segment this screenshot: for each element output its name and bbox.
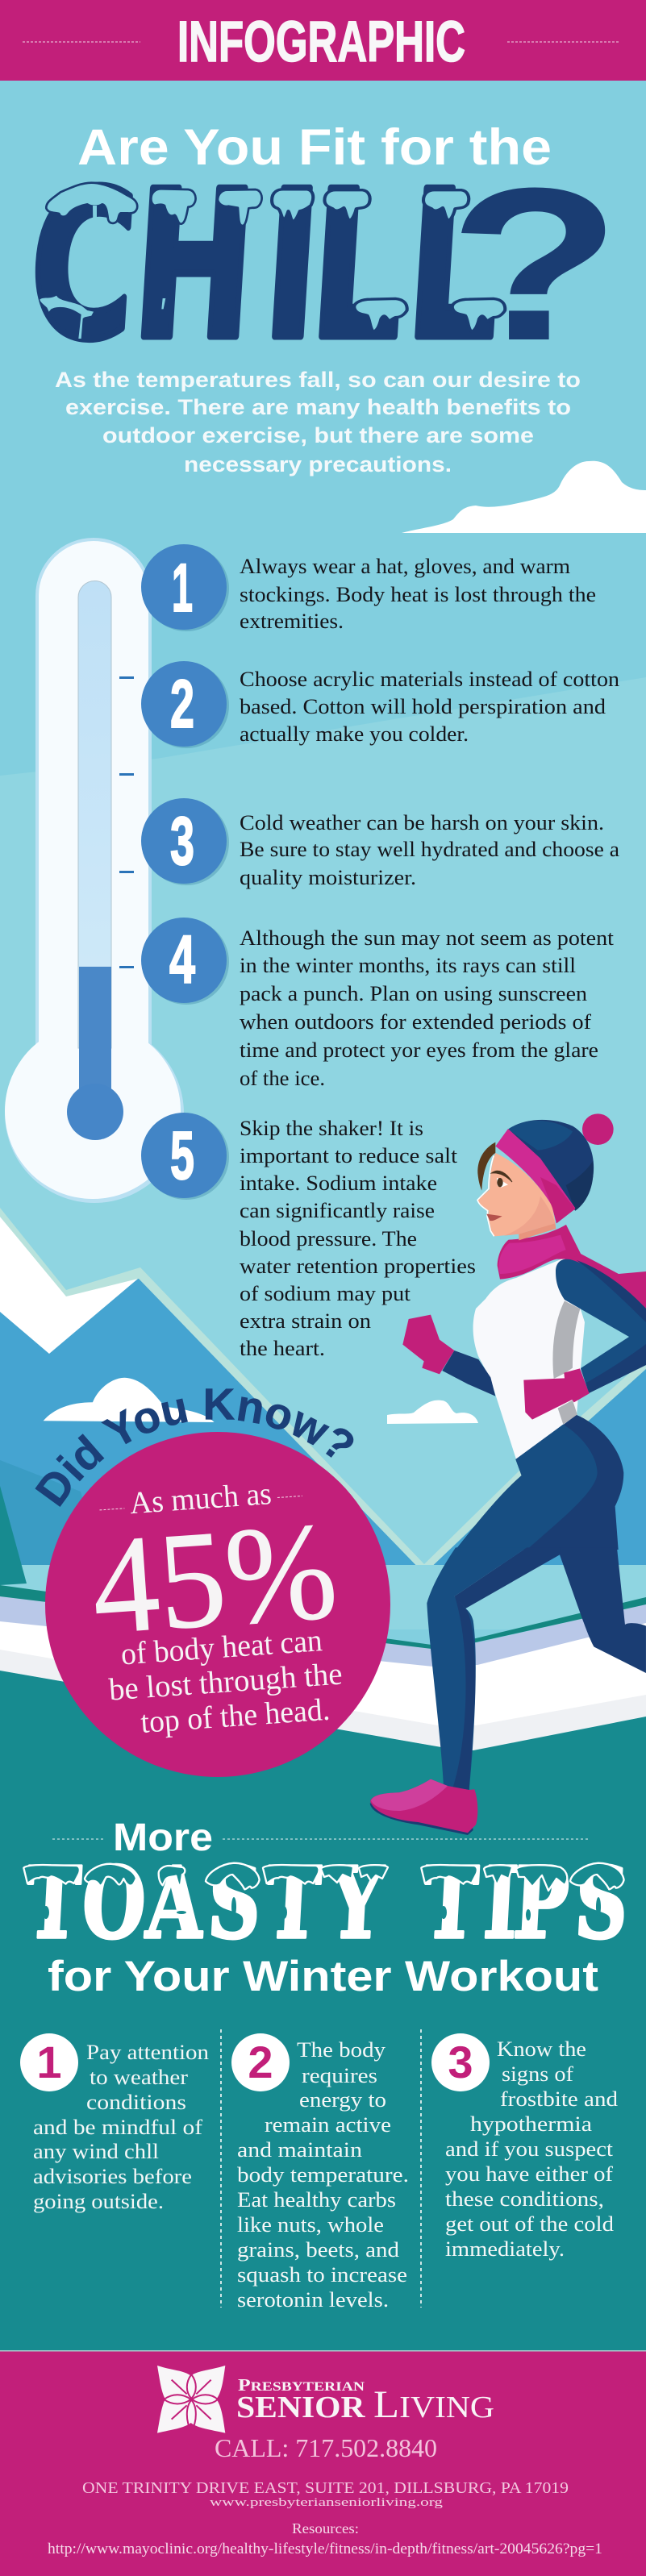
did you know callout: As much as: [129, 1476, 273, 1521]
toasty tip 3: these conditions,: [445, 2187, 604, 2211]
toasty tip 2: requires: [302, 2064, 377, 2087]
logo wordmark: SENIOR LIVING: [236, 2383, 494, 2426]
toasty tip 2: and maintain: [237, 2138, 362, 2162]
mercury: [79, 967, 111, 1104]
footer: [0, 2350, 646, 2576]
toasty tip 2: squash to increase: [237, 2263, 407, 2287]
toasty tip 1: conditions: [86, 2091, 186, 2114]
title line: Are You Fit for the: [77, 119, 552, 176]
toasty tip 2: Eat healthy carbs: [237, 2188, 396, 2212]
did you know callout: [35, 1388, 390, 1777]
toasty tip 3: [431, 2033, 618, 2261]
tip 4: pack a punch. Plan on using sunscreen: [240, 982, 587, 1005]
tip 1: Always wear a hat, gloves, and warm: [240, 555, 570, 578]
column dividers: [221, 2029, 421, 2308]
toasty tip 2: grains, beets, and: [237, 2238, 399, 2262]
tip 3: 3: [170, 803, 194, 879]
intro paragraph: As the temperatures fall, so can our desire to: [55, 368, 581, 392]
phone: CALL: 717.502.8840: [215, 2433, 437, 2462]
toasty tip 1: to weather: [90, 2066, 188, 2089]
tip 4: Although the sun may not seem as potent: [240, 926, 615, 950]
tube: [78, 581, 111, 1048]
legs: [370, 1547, 646, 1835]
pompom: [582, 1113, 614, 1145]
tip 4: 4: [169, 922, 195, 997]
tip 1: [141, 544, 596, 633]
toasty tip 1: Pay attention: [86, 2041, 209, 2064]
address: ONE TRINITY DRIVE EAST, SUITE 201, DILLSBURG, PA 17019: [82, 2479, 569, 2497]
left mitten and sleeve: [402, 1315, 590, 1420]
resources: Resources:: [292, 2520, 359, 2536]
right mitten: [523, 1368, 590, 1420]
tip 5: can significantly raise: [240, 1199, 435, 1222]
toasty tip 2: serotonin levels.: [237, 2288, 389, 2312]
header banner: [0, 0, 646, 81]
toasty tip 2: like nuts, whole: [237, 2213, 384, 2237]
tip 2: based. Cotton will hold perspiration and: [240, 695, 606, 718]
tip 4: [141, 918, 615, 1090]
tip 4: of the ice.: [240, 1067, 325, 1090]
tip 5: extra strain on: [240, 1309, 371, 1333]
title word: chill: CHILL: [23, 148, 506, 385]
toasty tip 3: 3: [448, 2037, 473, 2087]
tip 5: Skip the shaker! It is: [240, 1117, 423, 1140]
curved heading: [59, 1419, 348, 1509]
left cloud: [44, 1378, 215, 1422]
footer: http://www.mayoclinic.org/healthy-lifestyle/fitness/in-depth/fitness/art-20045626?pg=1: [48, 2541, 602, 2557]
tip 5: water retention properties: [240, 1255, 476, 1278]
back arm: [556, 1259, 646, 1393]
toasty tip 3: Know the: [497, 2037, 586, 2061]
toasty tip 3: and if you suspect: [445, 2137, 614, 2161]
frost specks: [43, 1897, 601, 1929]
tree: [0, 1486, 27, 1585]
toasty tip 2: energy to: [299, 2088, 386, 2112]
tip 2: [141, 661, 619, 748]
head: [477, 1113, 614, 1280]
tip 2: actually make you colder.: [240, 722, 469, 746]
tip 3: Be sure to stay well hydrated and choose a: [240, 838, 619, 861]
tip 5: intake. Sodium intake: [240, 1171, 437, 1195]
toasty tip 1: and be mindful of: [33, 2116, 202, 2139]
right cloud: [387, 1400, 478, 1424]
toasty tip 3: hypothermia: [470, 2112, 593, 2136]
header banner: INFOGRAPHIC: [177, 10, 465, 74]
toasty tip 2: remain active: [265, 2113, 391, 2137]
pink circle: [45, 1432, 390, 1777]
thermometer: [5, 538, 184, 1203]
toasty tip 1: [20, 2033, 209, 2213]
tip 5: 5: [170, 1117, 194, 1193]
tip 2: Choose acrylic materials instead of cotton: [240, 668, 619, 691]
tip 4: in the winter months, its rays can still: [240, 954, 576, 977]
did you know callout: be lost through the: [108, 1656, 344, 1708]
did you know callout: top of the head.: [140, 1692, 331, 1740]
more toasty tips heading: TOASTY TIPS: [23, 1846, 631, 1962]
shoe: [370, 1800, 473, 1835]
did you know callout: Did You Know?: [35, 1388, 353, 1507]
icy caps on letters: [23, 1863, 624, 1889]
intro paragraph: exercise. There are many health benefits to: [65, 395, 571, 419]
toasty tip 3: you have either of: [445, 2162, 613, 2186]
toasty tip 1: any wind chll: [33, 2140, 159, 2163]
intro paragraph: [55, 368, 581, 476]
tip 2: 2: [170, 666, 194, 742]
tip 4: when outdoors for extended periods of: [240, 1010, 591, 1034]
intro paragraph: necessary precautions.: [184, 452, 452, 476]
intro paragraph: outdoor exercise, but there are some: [102, 423, 534, 447]
tip 5: the heart.: [240, 1337, 325, 1360]
toasty tip 2: body temperature.: [237, 2163, 409, 2187]
toasty tip 2: The body: [297, 2038, 386, 2062]
snow caps on chill letters: [40, 183, 505, 339]
tip 1: extremities.: [240, 610, 344, 633]
grey stripe: [552, 1300, 580, 1425]
subheading: for Your Winter Workout: [48, 1953, 598, 2000]
snow cap: [0, 1217, 138, 1354]
mountains: [0, 1208, 646, 1574]
more toasty tips heading: More: [113, 1817, 213, 1859]
tip 3: Cold weather can be harsh on your skin.: [240, 811, 604, 834]
lighter sky hill: [0, 677, 646, 1613]
did you know callout: of body heat can: [120, 1623, 323, 1671]
website: www.presbyterianseniorliving.org: [210, 2496, 444, 2509]
tip 5: important to reduce salt: [240, 1144, 458, 1167]
toasty tip 2: [231, 2033, 409, 2312]
toasty tip 3: signs of: [502, 2062, 573, 2086]
toasty tip 2: 2: [248, 2037, 273, 2087]
logo mark: [157, 2366, 225, 2433]
toasty tip 1: advisories before: [33, 2165, 192, 2188]
cloud top right: [402, 461, 646, 533]
tip 5: [141, 1113, 476, 1360]
ground layers: [0, 1486, 646, 2352]
logo wordmark: PRESBYTERIAN: [238, 2375, 365, 2395]
hips and thigh: [456, 1415, 623, 1550]
darker foothill: [0, 1460, 101, 1567]
tip 4: time and protect yor eyes from the glare: [240, 1038, 598, 1062]
tip 3: [141, 798, 619, 889]
toasty tip 3: immediately.: [445, 2237, 565, 2261]
toasty tip 1: 1: [36, 2037, 62, 2087]
tip 3: quality moisturizer.: [240, 866, 416, 889]
toasty tip 1: going outside.: [33, 2190, 164, 2213]
tip 5: blood pressure. The: [240, 1227, 417, 1251]
tick marks: [119, 676, 134, 968]
did you know callout: 45%: [87, 1494, 342, 1664]
toasty tip 3: frostbite and: [500, 2087, 618, 2111]
tip 1: stockings. Body heat is lost through the: [240, 583, 596, 606]
toasty tip 3: get out of the cold: [445, 2212, 614, 2236]
torso: [473, 1258, 585, 1459]
title word: chill: ?: [448, 144, 621, 386]
tip 1: 1: [172, 550, 193, 626]
runner illustration: [370, 1113, 646, 1835]
tip 5: of sodium may put: [240, 1282, 411, 1305]
scarf tail: [565, 1225, 646, 1310]
